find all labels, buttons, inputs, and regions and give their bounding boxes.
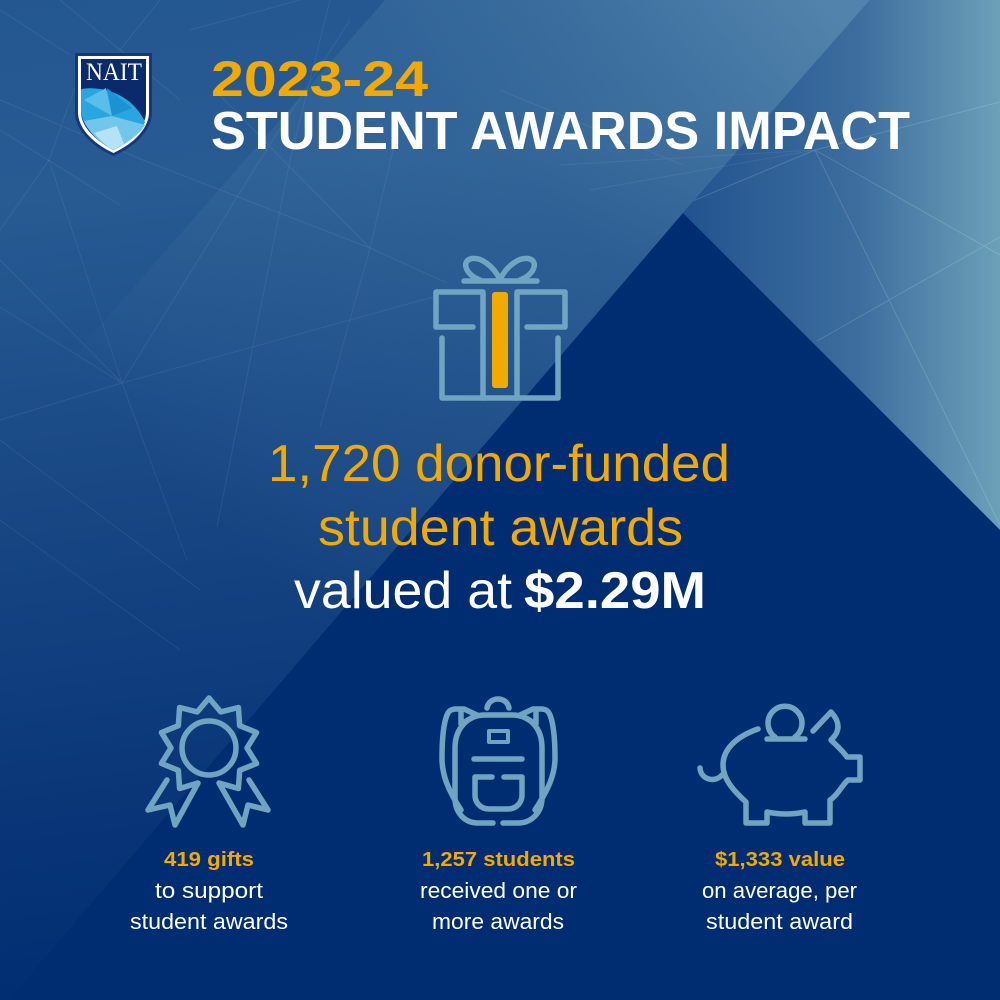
stat: gifts: to support: [155, 878, 263, 903]
stat: gifts: 419 gifts: [164, 849, 254, 871]
headline line 3: valued at: [294, 562, 513, 620]
stat: students: received one or: [420, 878, 577, 903]
icon: piggy bank: [700, 706, 860, 823]
stat: average value: [702, 849, 857, 934]
stat: students: more awards: [432, 909, 564, 934]
headline: [268, 435, 730, 620]
stat: gifts: [130, 849, 288, 934]
stat: average value: student award: [706, 909, 853, 934]
title: [211, 51, 910, 161]
stat: average value: $1,333 value: [715, 849, 845, 871]
headline value: $2.29M: [524, 562, 706, 620]
stat: students: 1,257 students: [422, 849, 575, 871]
title main: STUDENT AWARDS IMPACT: [211, 101, 910, 161]
title year: 2023-24: [211, 51, 428, 107]
icon: rosette: [148, 698, 268, 825]
logo: NAIT shield: NAIT: [86, 59, 142, 86]
headline line 1: 1,720 donor-funded: [268, 435, 730, 493]
icon: backpack: [442, 699, 555, 823]
stat: gifts: student awards: [130, 909, 288, 934]
stat: average value: on average, per: [702, 878, 857, 903]
headline line 2: student awards: [318, 499, 683, 557]
icon: gift: [436, 258, 565, 398]
logo: NAIT shield: [75, 53, 152, 156]
stat: students: [420, 849, 577, 934]
